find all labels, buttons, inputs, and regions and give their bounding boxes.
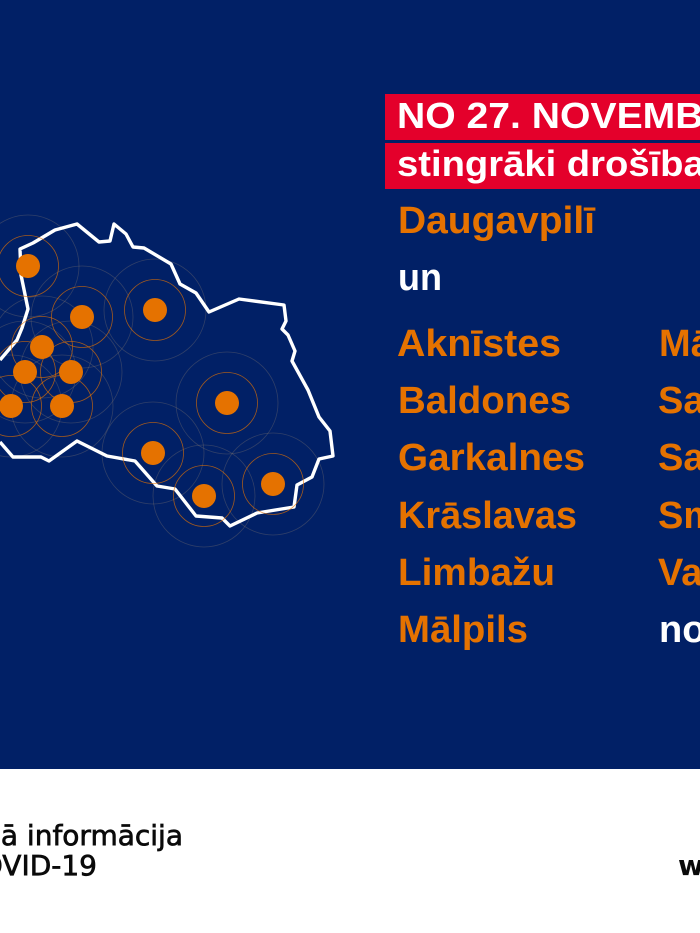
footer: information text [0, 819, 183, 882]
heading banner line 2: stingrāki drošības [397, 143, 700, 184]
municipalities list: left column: Mālpils [398, 609, 528, 651]
municipalities list: left column: Baldones [398, 380, 571, 422]
outer pulse rings [0, 215, 324, 547]
city name: Daugavpilī [398, 200, 595, 242]
inner pulse rings [0, 236, 304, 526]
municipalities list: right column [658, 323, 700, 651]
municipalities list: left column: Garkalnes [398, 437, 585, 479]
orange location dots [0, 254, 285, 508]
connector word: un [398, 257, 442, 299]
municipalities list: left column: Aknīstes [397, 323, 561, 365]
municipalities list: left column: Krāslavas [398, 495, 577, 537]
municipalities list: left column: Limbažu [398, 552, 555, 594]
map of region with outbreak markers [0, 215, 333, 547]
map outline [0, 224, 333, 526]
municipalities list: left column [397, 323, 585, 651]
